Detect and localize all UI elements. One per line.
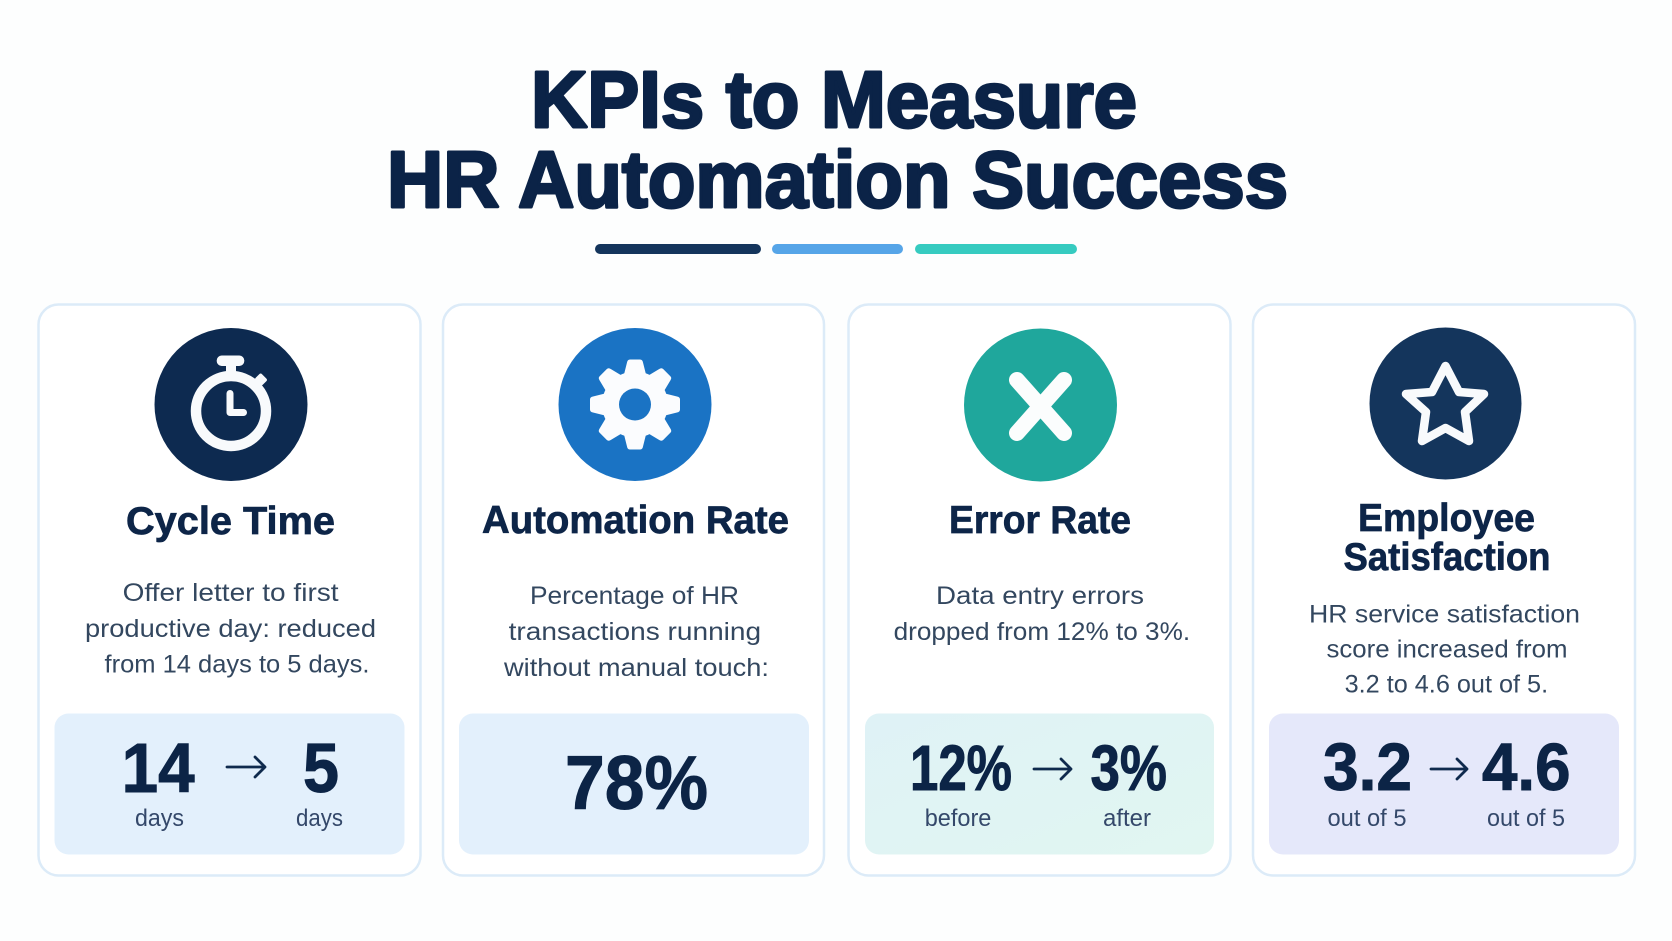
stat box: 14 to 5 days: days bbox=[135, 805, 184, 832]
text: error rate description bbox=[894, 582, 1190, 646]
title: KPIs to Measure bbox=[531, 55, 1137, 144]
stat box: 3.2 to 4.6: 4.6 bbox=[1482, 730, 1570, 805]
stat box: 78% bbox=[459, 714, 809, 854]
panel: employee satisfaction bbox=[1253, 304, 1635, 876]
stat box: 3.2 to 4.6 bbox=[1269, 714, 1619, 854]
heading: automation rate: Automation Rate bbox=[482, 499, 789, 542]
stat box: 14 to 5 days: 14 bbox=[122, 729, 195, 807]
panel: error rate: after bbox=[1103, 805, 1151, 832]
stat box: 3.2 to 4.6: 3.2 bbox=[1323, 730, 1412, 805]
text: automation rate description: without manual touch: bbox=[503, 654, 769, 682]
text: cycle time description: from 14 days to 5 days. bbox=[104, 650, 370, 678]
text: employee satisfaction description: score increased from bbox=[1326, 636, 1568, 664]
stat box: 78%: 78% bbox=[565, 741, 708, 826]
stat box: 3.2 to 4.6: out of 5 bbox=[1487, 805, 1565, 832]
icon: gear bbox=[558, 328, 712, 481]
stat box: 14 to 5 days: 5 bbox=[303, 729, 339, 807]
text: cycle time description: productive day: reduced bbox=[85, 615, 376, 643]
icon: stopwatch bbox=[154, 328, 308, 481]
heading: employee satisfaction bbox=[1344, 497, 1550, 579]
panel: error rate: 3% bbox=[1090, 732, 1167, 804]
title accent bars bbox=[595, 244, 1077, 254]
panel: error rate bbox=[848, 304, 1230, 876]
heading: employee satisfaction: Employee bbox=[1358, 497, 1535, 540]
text: error rate description: Data entry errors bbox=[936, 582, 1144, 610]
text: automation rate description: Percentage of HR bbox=[530, 582, 739, 610]
text: automation rate description: transactions running bbox=[509, 618, 761, 646]
heading: cycle time: Cycle Time bbox=[126, 500, 335, 543]
stat box: 14 to 5 days: days bbox=[296, 805, 343, 832]
text: cycle time description: Offer letter to first bbox=[123, 579, 339, 607]
text: employee satisfaction description: 3.2 to 4.6 out of 5. bbox=[1345, 670, 1548, 698]
panel: automation rate bbox=[443, 304, 824, 876]
icon: x mark bbox=[964, 328, 1117, 482]
title bbox=[387, 55, 1288, 224]
text: cycle time description bbox=[85, 579, 376, 678]
panel: error rate: 12% bbox=[910, 732, 1012, 804]
panel: cycle time bbox=[38, 304, 420, 876]
panel: error rate: before bbox=[925, 805, 991, 832]
heading: error rate: Error Rate bbox=[949, 499, 1131, 542]
text: employee satisfaction description: HR service satisfaction bbox=[1309, 600, 1580, 628]
text: employee satisfaction description bbox=[1309, 600, 1580, 698]
heading: employee satisfaction: Satisfaction bbox=[1344, 536, 1550, 579]
text: error rate description: dropped from 12% to 3%. bbox=[894, 618, 1190, 646]
stat box: 14 to 5 days bbox=[54, 714, 404, 854]
title: HR Automation Success bbox=[387, 135, 1288, 224]
icon: star bbox=[1370, 328, 1522, 480]
stat box: 3.2 to 4.6: out of 5 bbox=[1328, 805, 1406, 832]
text: automation rate description bbox=[503, 582, 769, 682]
